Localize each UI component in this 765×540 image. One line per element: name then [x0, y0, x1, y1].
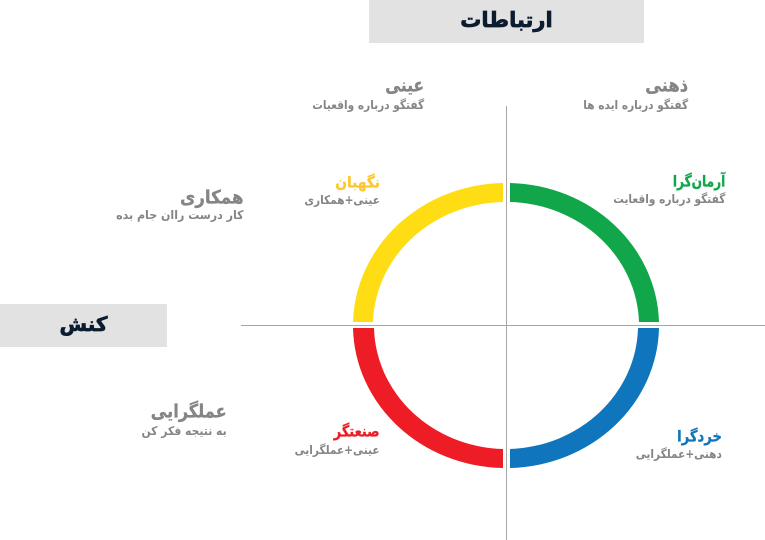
- label: idealist: [613, 172, 726, 206]
- arc: red artisan quadrant: [353, 328, 503, 468]
- label: concrete: گفتگو درباره واقعیات: [312, 98, 424, 112]
- label: rational: [636, 427, 722, 461]
- label: guardian: [304, 173, 380, 207]
- label: pragmatic: به نتیجه فکر کن: [142, 424, 227, 438]
- label: abstract: ذهنی: [645, 75, 688, 97]
- heading: communication: [369, 0, 644, 43]
- label: concrete: عینی: [385, 75, 424, 97]
- label: idealist: آرمان‌گرا: [672, 173, 725, 191]
- label: pragmatic: [142, 400, 227, 438]
- arc: green idealist quadrant: [510, 183, 659, 322]
- heading: communication: ارتباطات: [460, 8, 553, 32]
- label: idealist: گفتگو درباره واقعایت: [613, 192, 725, 206]
- label: rational: دهنی+عملگرایی: [636, 446, 722, 460]
- label: guardian: عینی+همکاری: [304, 192, 380, 206]
- label: guardian: نگهبان: [335, 174, 380, 192]
- label: abstract: گفتگو درباره ایده ها: [583, 98, 688, 112]
- heading: action: [0, 304, 167, 347]
- label: abstract: [583, 75, 688, 112]
- label: artisan: عینی+عملگرایی: [295, 442, 380, 456]
- label: cooperative: همکاری: [180, 187, 244, 209]
- label: pragmatic: عملگرایی: [151, 401, 227, 423]
- label: cooperative: کار درست را‌ان جام بده: [117, 208, 244, 222]
- label: artisan: صنعتگر: [334, 423, 380, 441]
- label: rational: خردگرا: [677, 428, 722, 446]
- heading: action: کنش: [59, 312, 108, 336]
- label: artisan: [295, 422, 380, 457]
- label: cooperative: [116, 187, 244, 222]
- label: concrete: [312, 75, 424, 112]
- arc: yellow guardian quadrant: [353, 183, 503, 322]
- arc: blue rational quadrant: [510, 328, 659, 468]
